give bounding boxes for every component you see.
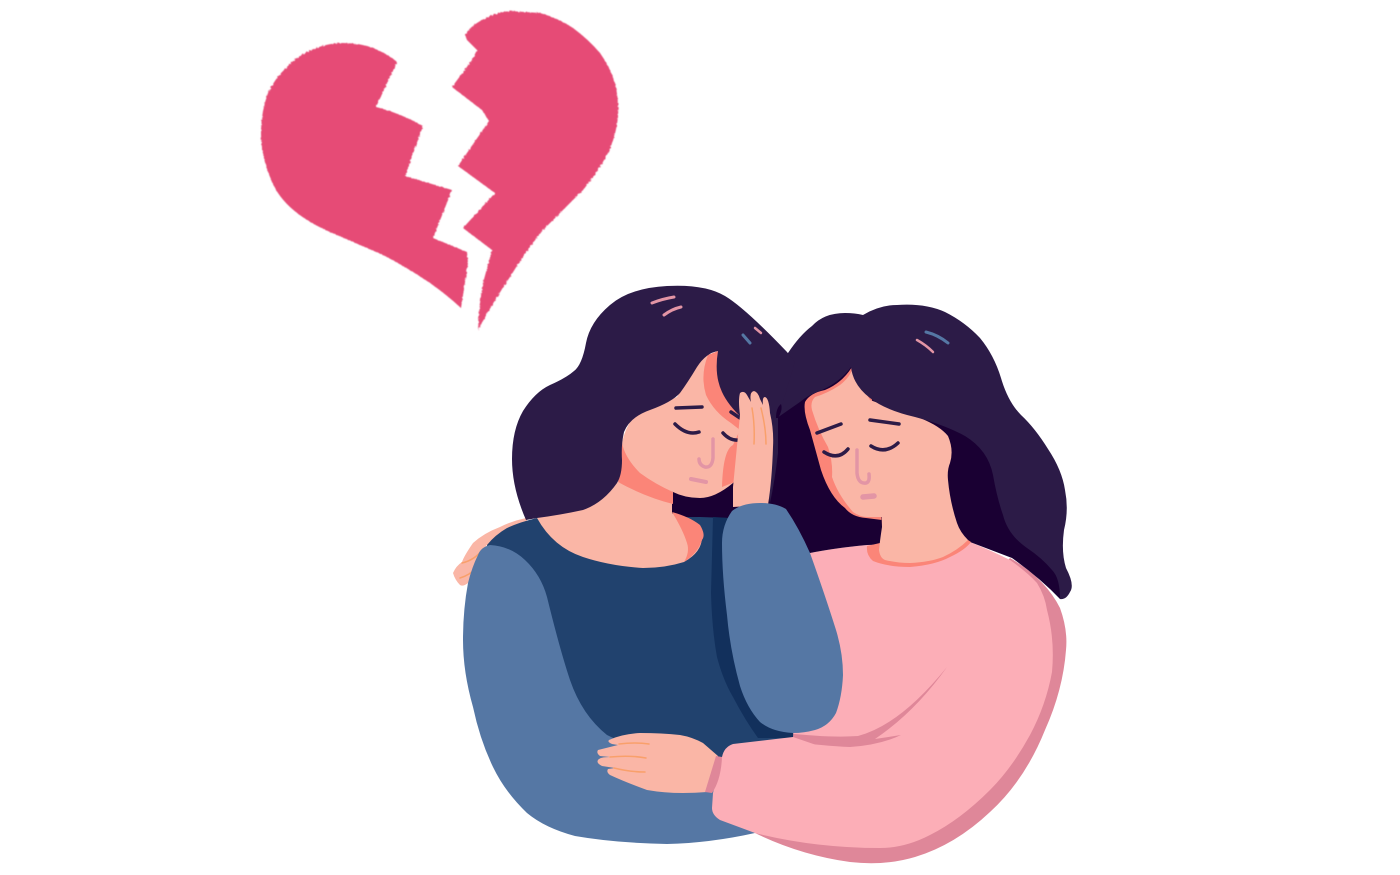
figure: right woman hand on arm <box>597 733 722 793</box>
icon: right woman nose and mouth <box>857 450 874 497</box>
icon: right woman eyebrows and closed eyes <box>817 420 899 456</box>
figure: left woman hair <box>512 286 795 520</box>
figure: left woman bent arm <box>722 503 843 733</box>
icon: broken heart <box>261 11 618 330</box>
icon: left woman eyebrows and closed eyes <box>675 407 740 440</box>
left woman outer sleeve <box>463 545 755 844</box>
figure: right woman neck and face <box>805 367 971 567</box>
icon: right hair highlights <box>917 332 948 352</box>
figure: left woman sweater body <box>463 517 800 844</box>
figure: right woman sweater <box>712 542 1066 863</box>
figure: left woman neck and face <box>526 351 740 568</box>
figure: right woman front hair <box>750 305 1072 599</box>
figure: right woman back hand on shoulder <box>453 518 535 586</box>
figure: right woman dark back hair <box>672 360 1062 599</box>
figure: left woman raised hand <box>733 391 773 507</box>
icon: left woman nose and mouth <box>691 439 713 482</box>
icon: left hair highlights <box>652 297 761 343</box>
figure: right woman sleeve cuff <box>712 737 860 840</box>
